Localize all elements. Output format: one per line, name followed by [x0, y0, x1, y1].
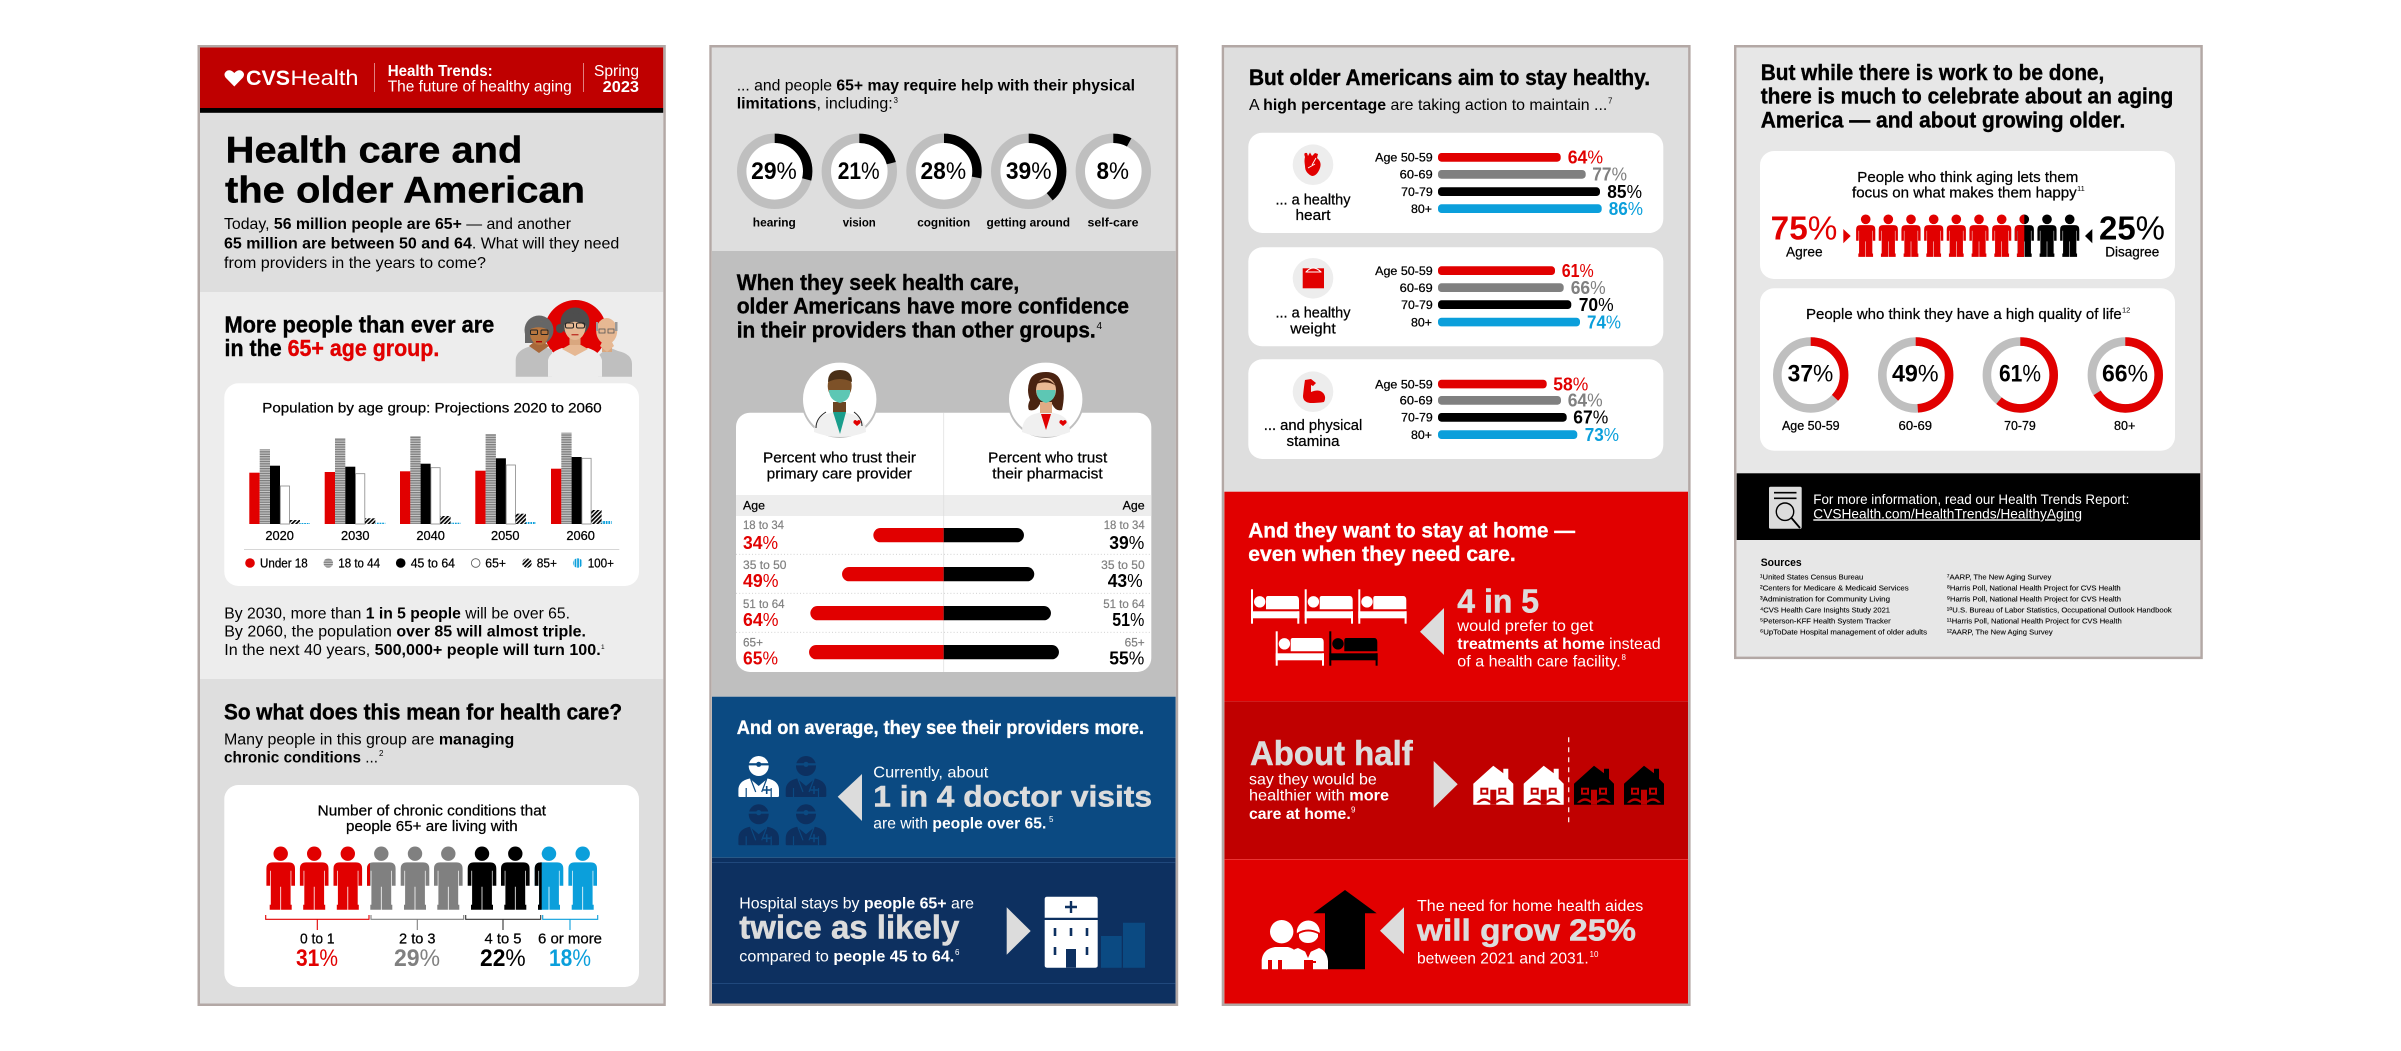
- donut charts: limitations: self-care: [1088, 216, 1139, 230]
- left row labels: 18 to 34: [743, 520, 785, 532]
- left row labels: 65%: [743, 648, 778, 668]
- title: [225, 128, 585, 210]
- sources: ⁴CVS Health Care Insights Study 2021: [1760, 605, 1890, 614]
- donut charts: limitations: vision: [843, 216, 876, 230]
- year axis labels: 2030: [341, 529, 370, 543]
- panel: population chart card: [224, 383, 639, 586]
- bar chart: heart: [1375, 148, 1643, 219]
- column titles: [763, 449, 1108, 482]
- percent values: 29%: [394, 945, 440, 972]
- header banner: 2023: [603, 79, 639, 96]
- text: physical limitations intro: ... and people 65+ may require help with their physical: [737, 78, 1135, 95]
- stat: hospital stays: Hospital stays by people 65+ are: [739, 896, 974, 913]
- sources: ⁸Harris Poll, National Health Project for CVS Health: [1947, 583, 2121, 592]
- icon: heart: [1293, 144, 1333, 185]
- sources: ⁷AARP, The New Aging Survey: [1947, 572, 2051, 581]
- bar chart: weight: 61%: [1562, 261, 1594, 281]
- card: quality of life: [1760, 288, 2175, 451]
- year axis labels: 2060: [566, 529, 595, 543]
- heading: what does this mean: So what does this mean for health care?: [224, 699, 622, 724]
- bar chart: weight: 60-69: [1400, 281, 1433, 295]
- pictogram: ten people: [266, 846, 597, 910]
- icon: five beds: [1251, 589, 1407, 666]
- text: population facts: By 2030, more than 1 in 5 people will be over 65.: [224, 605, 570, 622]
- heading: stay at home: [1248, 519, 1575, 566]
- arrow: [1434, 761, 1458, 808]
- sources: ¹²AARP, The New Aging Survey: [1947, 627, 2053, 636]
- stat: hospital stays: compared to people 45 to 64.: [739, 949, 954, 966]
- bar chart: heart: 80+: [1411, 202, 1432, 216]
- legend: 18 to 44: [338, 556, 380, 570]
- panel: trust table card: [736, 362, 1151, 672]
- donut charts: quality of life: [1777, 342, 2159, 433]
- icon: three older adults: [516, 300, 632, 377]
- stat: about half: healthier with more: [1249, 788, 1389, 805]
- stat: about half: say they would be: [1249, 771, 1377, 788]
- percent values: 22%: [480, 945, 526, 972]
- age headers: Age: [1123, 498, 1145, 512]
- stat: agree: Agree: [1786, 244, 1823, 260]
- bar chart: stamina: 67%: [1573, 408, 1608, 428]
- header banner: The future of healthy aging: [388, 79, 572, 96]
- bar chart: heart: 70-79: [1401, 185, 1433, 199]
- left row labels: 49%: [743, 571, 778, 591]
- category labels: [300, 931, 602, 948]
- stat: 4 in 5: [1456, 582, 1661, 671]
- legend: 45 to 64: [411, 556, 455, 570]
- bar chart: stamina: 80+: [1411, 428, 1432, 442]
- sources: Sources: [1761, 557, 1802, 569]
- sources: ¹¹Harris Poll, National Health Project for CVS Health: [1947, 616, 2122, 625]
- donut charts: quality of life: 70-79: [2004, 419, 2036, 433]
- heading: confidence in providers: 4: [1096, 321, 1102, 332]
- card title: 12: [2122, 306, 2130, 314]
- icon: masked doctor: [802, 362, 877, 437]
- category labels: 6 or more: [538, 931, 602, 948]
- stat: doctor visits: are with people over 65.: [873, 816, 1046, 833]
- header banner: Spring: [594, 63, 639, 80]
- icon: home health aides and growth arrow: [1262, 890, 1377, 969]
- sources: ³Administration for Community Living: [1760, 594, 1890, 603]
- label: ... a healthy: [1276, 305, 1351, 322]
- heading: confidence in providers: [737, 270, 1129, 342]
- sources: ⁵Peterson-KFF Health System Tracker: [1760, 616, 1891, 625]
- stat: about half: [1249, 735, 1413, 823]
- legend: 85+: [537, 556, 557, 570]
- card: physical stamina: [1248, 359, 1663, 459]
- stat: hospital stays: [739, 896, 974, 966]
- column titles: Percent who trust their: [763, 449, 916, 466]
- column titles: their pharmacist: [992, 465, 1104, 482]
- card title: People who think they have a high quality of life: [1806, 306, 2122, 323]
- text: chronic conditions intro: chronic conditions ...: [224, 749, 378, 766]
- panel: chronic conditions card: [224, 785, 639, 987]
- bar chart: heart: 85%: [1607, 182, 1642, 202]
- heading: celebrate: But while there is work to be done,: [1761, 60, 2104, 85]
- chart title: Population by age group: Projections 2020 to 2060: [262, 399, 602, 415]
- year axis labels: 2020: [265, 529, 294, 543]
- icon: four doctors: [738, 756, 826, 845]
- left row labels: 35 to 50: [743, 560, 786, 572]
- stat: disagree: 25%: [2099, 209, 2165, 246]
- sources: ²Centers for Medicare & Medicaid Services: [1760, 583, 1909, 592]
- arrow: [1007, 907, 1031, 955]
- arrow: [1420, 608, 1444, 655]
- heading: celebrate: America — and about growing older.: [1761, 107, 2125, 132]
- label: weight: [1289, 320, 1337, 337]
- right row labels: [1101, 520, 1145, 668]
- heading: stay at home: even when they need care.: [1248, 543, 1516, 566]
- intro text: Today, 56 million people are 65+ — and another: [224, 216, 572, 233]
- donut charts: quality of life: 37%: [1788, 361, 1833, 388]
- icon: four houses: [1473, 737, 1664, 823]
- heading: see providers more: And on average, they see their providers more.: [737, 718, 1144, 739]
- text: report link: For more information, read our Health Trends Report:: [1813, 491, 2129, 507]
- icon: scale: [1293, 258, 1333, 299]
- left row labels: 65+: [743, 638, 763, 650]
- stat: doctor visits: 1 in 4 doctor visits: [873, 781, 1152, 814]
- intro text: [224, 216, 619, 272]
- bar chart: weight: 74%: [1587, 312, 1621, 332]
- stat: disagree: Disagree: [2105, 244, 2160, 260]
- text: population facts: In the next 40 years, 500,000+ people will turn 100.: [224, 642, 601, 659]
- legend: [245, 556, 614, 570]
- year axis labels: 2050: [491, 529, 520, 543]
- right row labels: 65+: [1125, 638, 1145, 650]
- category labels: 0 to 1: [300, 931, 335, 948]
- left row labels: 64%: [743, 610, 778, 630]
- header banner: Health Trends:: [388, 63, 493, 80]
- percent values: 31%: [296, 945, 338, 972]
- heading: more people than ever: More people than ever are: [224, 311, 494, 337]
- stat: home health aides: 10: [1590, 950, 1599, 959]
- bar chart: weight: Age 50-59: [1375, 264, 1433, 278]
- call to action band: [1737, 473, 2200, 540]
- stat: doctor visits: 5: [1049, 815, 1054, 824]
- panel: much to celebrate: [1735, 46, 2202, 658]
- text: population facts: [224, 605, 605, 659]
- bar chart: heart: 77%: [1592, 165, 1627, 185]
- icon: report with magnifier: [1769, 487, 1802, 529]
- year axis labels: 2040: [416, 529, 445, 543]
- heading: more people than ever: [224, 311, 494, 361]
- bar chart: heart: 60-69: [1400, 168, 1433, 182]
- text: report link: [1813, 491, 2129, 521]
- bar chart: heart: Age 50-59: [1375, 150, 1433, 164]
- donut charts: quality of life: 60-69: [1899, 419, 1932, 433]
- bar chart: weight: 80+: [1411, 315, 1432, 329]
- donut charts: limitations: 28%: [920, 158, 966, 185]
- bar chart: stamina: Age 50-59: [1375, 377, 1433, 391]
- label: ... and physical: [1264, 417, 1362, 434]
- donut charts: limitations: 8%: [1096, 158, 1129, 185]
- bar chart: stamina: 60-69: [1400, 394, 1433, 408]
- left row labels: 34%: [743, 533, 778, 553]
- stat: 4 in 5: would prefer to get: [1456, 618, 1594, 635]
- bar chart: heart: 86%: [1609, 199, 1643, 219]
- stat: 4 in 5: of a health care facility.: [1457, 654, 1621, 671]
- text: chronic conditions intro: [224, 731, 514, 766]
- text: physical limitations intro: 3: [894, 96, 898, 105]
- bar chart: stamina: 70-79: [1401, 411, 1433, 425]
- card title: People who think aging lets them: [1857, 169, 2078, 186]
- stat: 4 in 5: 4 in 5: [1457, 582, 1539, 619]
- card title: people 65+ are living with: [346, 818, 518, 835]
- bar chart: stamina: 58%: [1553, 374, 1588, 394]
- card title: [318, 802, 547, 835]
- pictogram: ten people: [1856, 214, 2079, 257]
- label: [1276, 192, 1351, 224]
- label: [1276, 305, 1351, 337]
- right row labels: 39%: [1109, 533, 1144, 553]
- sources: ⁹Harris Poll, National Health Project for CVS Health: [1947, 594, 2121, 603]
- card title: Number of chronic conditions that: [318, 802, 547, 819]
- title: Health care and: [226, 128, 522, 170]
- label: stamina: [1286, 433, 1340, 450]
- donut charts: quality of life: 49%: [1892, 361, 1939, 388]
- stat: about half: About half: [1250, 735, 1413, 773]
- header banner: Health: [290, 67, 358, 90]
- bar chart: stamina: 73%: [1585, 425, 1619, 445]
- left row labels: [743, 520, 786, 668]
- panel: health care and the older American: [199, 46, 665, 1005]
- category labels: 4 to 5: [484, 931, 522, 948]
- heading: confidence in providers: When they seek health care,: [737, 270, 1019, 295]
- brackets: [266, 915, 598, 930]
- intro text: from providers in the years to come?: [224, 255, 486, 272]
- stat: about half: 9: [1351, 806, 1356, 814]
- bar chart: heart: 64%: [1568, 148, 1603, 168]
- donut charts: limitations: cognition: [917, 216, 970, 230]
- text: physical limitations intro: limitations, including:: [737, 96, 893, 113]
- heading: confidence in providers: in their providers than other groups.: [737, 317, 1096, 342]
- donut charts: quality of life: 66%: [2102, 361, 2148, 388]
- bar chart: [249, 433, 612, 524]
- stat: agree: 75%: [1771, 209, 1837, 246]
- sources: ⁶UpToDate Hospital management of older adults: [1760, 627, 1927, 636]
- right row labels: 51 to 64: [1103, 599, 1145, 611]
- heading: stay healthy: But older Americans aim to stay healthy.: [1249, 65, 1650, 90]
- stat: 4 in 5: 8: [1622, 653, 1626, 662]
- legend: Under 18: [260, 556, 308, 570]
- text: chronic conditions intro: 2: [379, 749, 384, 758]
- heading: stay at home: And they want to stay at home —: [1248, 519, 1575, 542]
- header banner: CVS: [246, 67, 290, 90]
- right row labels: 35 to 50: [1101, 560, 1145, 572]
- column titles: Percent who trust: [988, 449, 1108, 466]
- diverging bar chart: [809, 528, 1059, 659]
- card title: 11: [2077, 184, 2085, 193]
- card title: focus on what makes them happy: [1852, 185, 2077, 202]
- donut charts: limitations: 21%: [838, 158, 880, 185]
- donut charts: limitations: hearing: [753, 216, 796, 230]
- text: physical limitations intro: [737, 78, 1135, 113]
- bar chart: stamina: [1375, 374, 1619, 445]
- stat: home health aides: [1416, 898, 1643, 967]
- right row labels: 43%: [1108, 571, 1143, 591]
- panel: physical limitations and provider confidence: [711, 46, 1177, 1005]
- stat: home health aides: will grow 25%: [1416, 913, 1636, 948]
- stat: home health aides: The need for home health aides: [1417, 898, 1643, 915]
- label: ... a healthy: [1276, 192, 1351, 209]
- percent values: 18%: [549, 945, 591, 972]
- arrow: [1380, 907, 1404, 954]
- donut charts: quality of life: Age 50-59: [1782, 419, 1840, 433]
- stat: doctor visits: Currently, about: [873, 764, 989, 781]
- card: aging and happiness: [1760, 151, 2175, 279]
- heading: celebrate: [1761, 60, 2173, 132]
- donut charts: limitations: [742, 138, 1146, 230]
- text: population facts: By 2060, the population over 85 will almost triple.: [224, 624, 586, 641]
- stat: doctor visits: [873, 764, 1152, 833]
- label: heart: [1296, 207, 1331, 224]
- sources: [1760, 557, 2172, 636]
- bar chart: weight: 70-79: [1401, 298, 1433, 312]
- age headers: [743, 498, 1145, 512]
- icon: masked pharmacist: [1008, 362, 1083, 437]
- legend: 100+: [588, 556, 614, 570]
- legend: 65+: [485, 556, 506, 570]
- icon: flexed arm: [1293, 371, 1333, 412]
- stat: hospital stays: 6: [955, 948, 960, 957]
- bar chart: weight: [1375, 261, 1621, 332]
- category labels: 2 to 3: [399, 931, 436, 948]
- donut charts: limitations: 39%: [1006, 158, 1052, 185]
- right row labels: 18 to 34: [1104, 520, 1145, 532]
- title: the older American: [225, 168, 585, 210]
- header banner: [200, 48, 663, 113]
- intro text: 65 million are between 50 and 64. What will they need: [224, 235, 619, 252]
- bar chart: weight: 66%: [1571, 278, 1606, 298]
- heading: celebrate: there is much to celebrate about an aging: [1761, 84, 2173, 109]
- stat: home health aides: between 2021 and 2031.: [1417, 950, 1589, 967]
- heading: more people than ever: in the 65+ age group.: [224, 335, 439, 361]
- label: [1264, 417, 1362, 450]
- donut charts: quality of life: 80+: [2114, 419, 2135, 433]
- year axis labels: [265, 529, 595, 543]
- donut charts: limitations: 29%: [751, 158, 797, 185]
- stat: about half: care at home.: [1249, 806, 1351, 823]
- text: population facts: 1: [601, 644, 605, 651]
- arrow: [838, 774, 862, 821]
- sources: ¹United States Census Bureau: [1760, 572, 1863, 581]
- subheading: A high percentage are taking action to maintain ...: [1249, 97, 1607, 114]
- donut charts: limitations: getting around: [987, 216, 1070, 230]
- card: healthy weight: [1248, 247, 1663, 346]
- bar chart: weight: 70%: [1579, 295, 1614, 315]
- age headers: Age: [743, 498, 765, 512]
- subheading: 7: [1608, 96, 1613, 106]
- right row labels: 51%: [1112, 610, 1144, 630]
- left row labels: 51 to 64: [743, 599, 785, 611]
- sources: ¹⁰U.S. Bureau of Labor Statistics, Occupational Outlook Handbook: [1947, 605, 2172, 614]
- text: chronic conditions intro: Many people in this group are managing: [224, 731, 514, 748]
- stat: 4 in 5: treatments at home instead: [1457, 636, 1661, 653]
- icon: hospital: [1045, 897, 1145, 968]
- card: healthy heart: [1248, 133, 1663, 233]
- heading: confidence in providers: older Americans have more confidence: [737, 294, 1129, 319]
- right row labels: 55%: [1109, 648, 1144, 668]
- bar chart: stamina: 64%: [1568, 391, 1603, 411]
- card title: [1852, 169, 2085, 202]
- stat: agree: [1771, 209, 1851, 260]
- donut charts: quality of life: 61%: [1999, 361, 2041, 388]
- text: report link: CVSHealth.com/HealthTrends/HealthyAging: [1813, 505, 2082, 521]
- panel: aim to stay healthy and care at home: [1223, 46, 1689, 1005]
- column titles: primary care provider: [767, 465, 912, 482]
- percent values: [296, 945, 591, 972]
- stat: disagree: [2085, 209, 2165, 260]
- stat: hospital stays: twice as likely: [739, 909, 960, 946]
